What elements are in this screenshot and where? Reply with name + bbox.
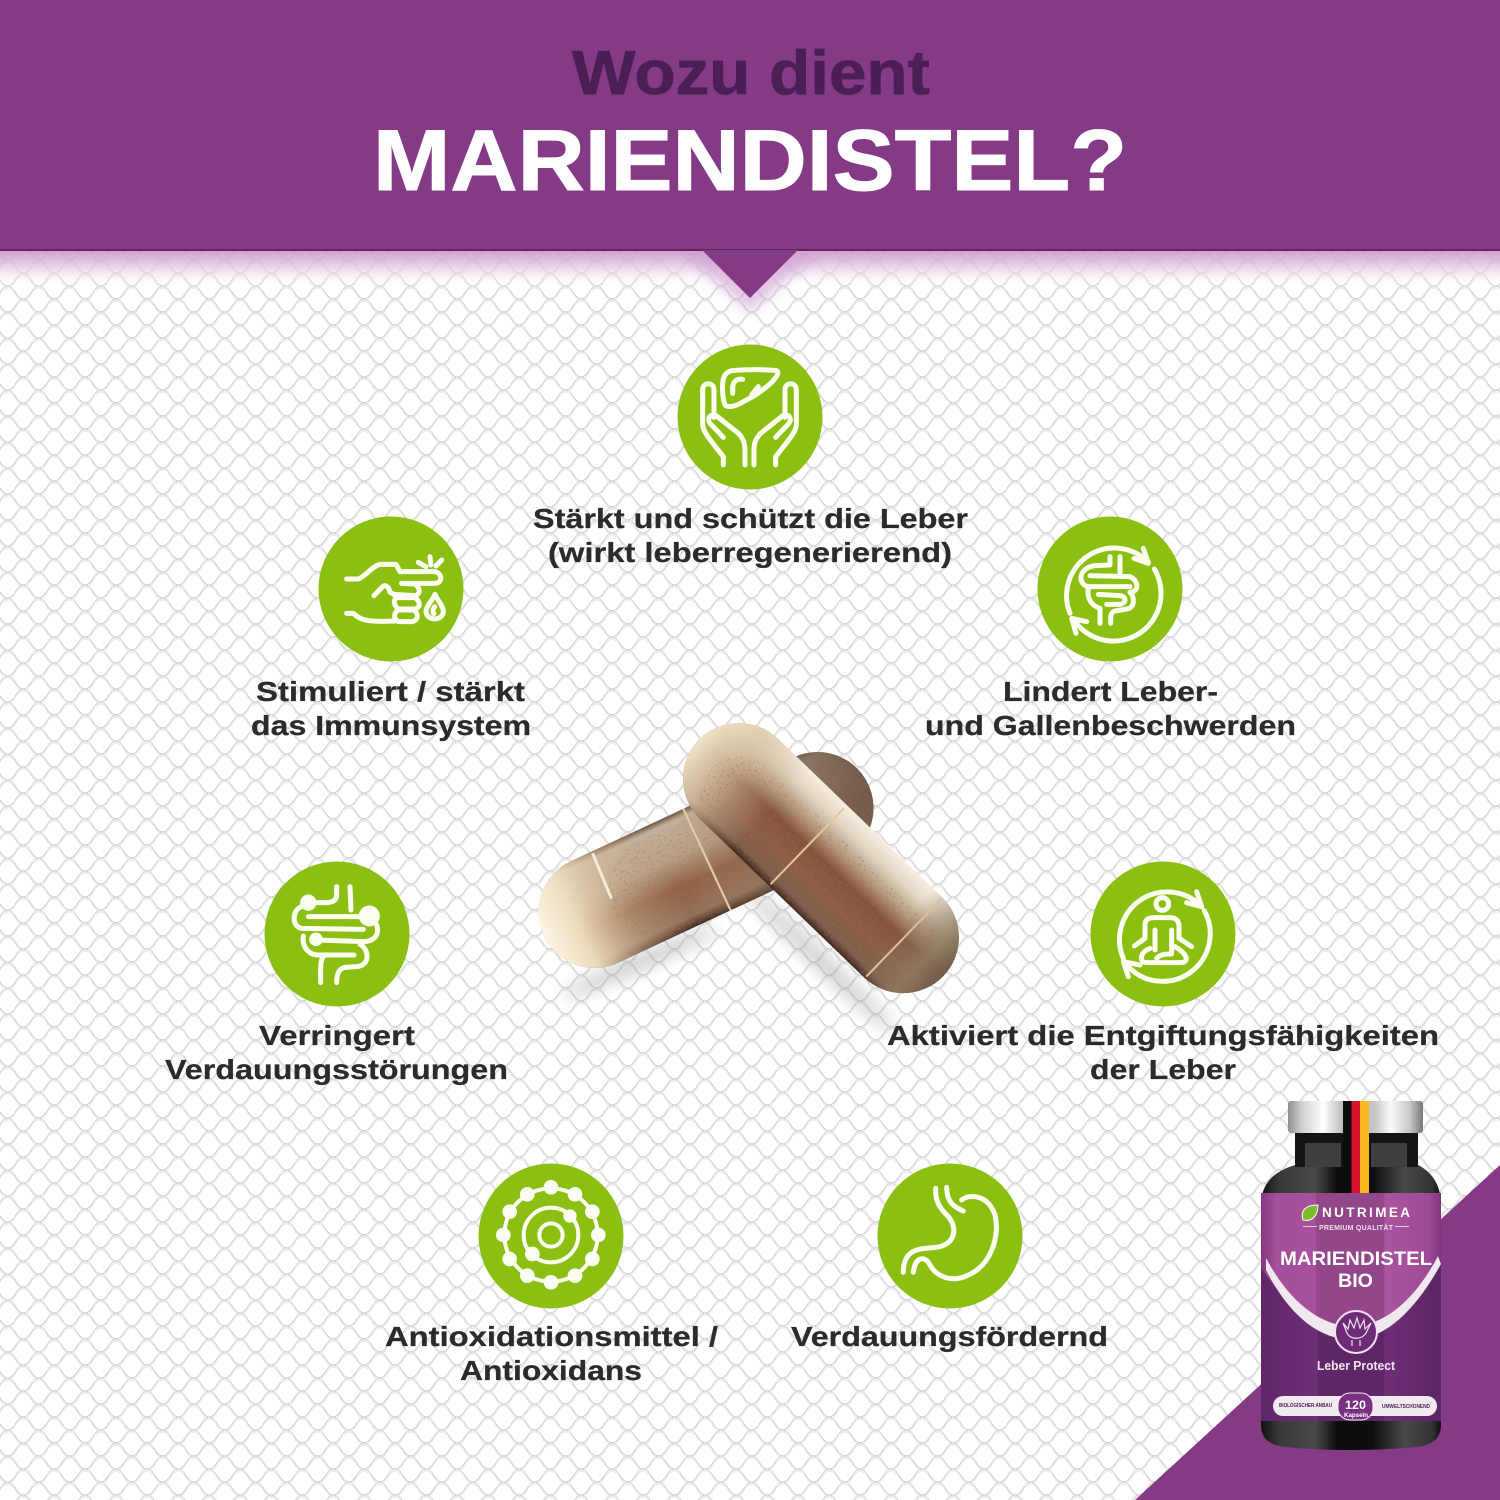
product name: BIO xyxy=(1338,1271,1373,1292)
icon: stomach xyxy=(878,1164,1022,1308)
product name: MARIENDISTEL xyxy=(1280,1249,1432,1270)
label: antioxidant: Antioxidationsmittel / xyxy=(385,1321,718,1352)
product bottle xyxy=(1261,1101,1441,1450)
badges pill xyxy=(1273,1393,1437,1420)
badges pill: 120 xyxy=(1345,1398,1366,1412)
benefit: immune system xyxy=(251,516,531,741)
label: detoxification: der Leber xyxy=(1090,1054,1236,1085)
label: antioxidant: Antioxidans xyxy=(460,1355,642,1386)
icon: intestine with cycle arrows xyxy=(1038,516,1182,662)
icon: molecule rings xyxy=(478,1164,624,1308)
badges pill: UMWELTSCHONEND xyxy=(1382,1404,1430,1410)
capsules photo xyxy=(520,700,982,1039)
label: detoxification: Aktiviert die Entgiftungsfähigkeiten xyxy=(887,1020,1439,1051)
label background xyxy=(1261,1193,1441,1421)
thistle seal xyxy=(1335,1311,1377,1353)
benefit: digestive disorders xyxy=(165,862,508,1085)
label: liver: (wirkt leberregenerierend) xyxy=(548,537,952,568)
label: digestive disorders: Verdauungsstörungen xyxy=(165,1054,508,1085)
bottle cap xyxy=(1288,1101,1423,1133)
brand name: NUTRIMEA xyxy=(1322,1205,1410,1220)
bottle body xyxy=(1261,1133,1441,1450)
label: digestive disorders: Verringert xyxy=(259,1020,415,1051)
label: digestion: Verdauungsfördernd xyxy=(791,1321,1108,1352)
badges pill: BIOLOGISCHER ANBAU xyxy=(1279,1403,1332,1409)
benefit: digestion xyxy=(791,1164,1108,1352)
bottom right purple corner xyxy=(1135,1165,1500,1500)
label: liver and bile: Lindert Leber- xyxy=(1003,676,1218,707)
label: liver: Stärkt und schützt die Leber xyxy=(533,503,968,534)
german flag stripe xyxy=(1343,1101,1369,1193)
icon: inflamed intestine xyxy=(264,862,410,1006)
benefit: liver xyxy=(533,344,968,568)
badges pill: Kapseln xyxy=(1344,1412,1368,1419)
label: liver and bile: und Gallenbeschwerden xyxy=(925,710,1296,741)
icon: meditating figure with cycle arrows xyxy=(1090,862,1236,1006)
header banner xyxy=(0,0,1500,298)
brand tagline: PREMIUM QUALITÄT xyxy=(1319,1224,1394,1232)
label: immune system: das Immunsystem xyxy=(251,710,531,741)
label: immune system: Stimuliert / stärkt xyxy=(256,676,525,707)
icon: finger with drop xyxy=(318,516,464,662)
benefit: liver and bile xyxy=(925,516,1296,741)
benefit: antioxidant xyxy=(385,1164,718,1386)
icon: hands holding liver xyxy=(678,344,822,490)
back capsule xyxy=(520,734,892,986)
front capsule xyxy=(660,700,982,1016)
title: second line: MARIENDISTEL? xyxy=(373,113,1127,209)
title: first line: Wozu dient xyxy=(572,39,930,108)
product variant: Leber Protect xyxy=(1317,1359,1396,1373)
brand leaf xyxy=(1302,1205,1318,1220)
benefit: detoxification xyxy=(887,862,1439,1085)
